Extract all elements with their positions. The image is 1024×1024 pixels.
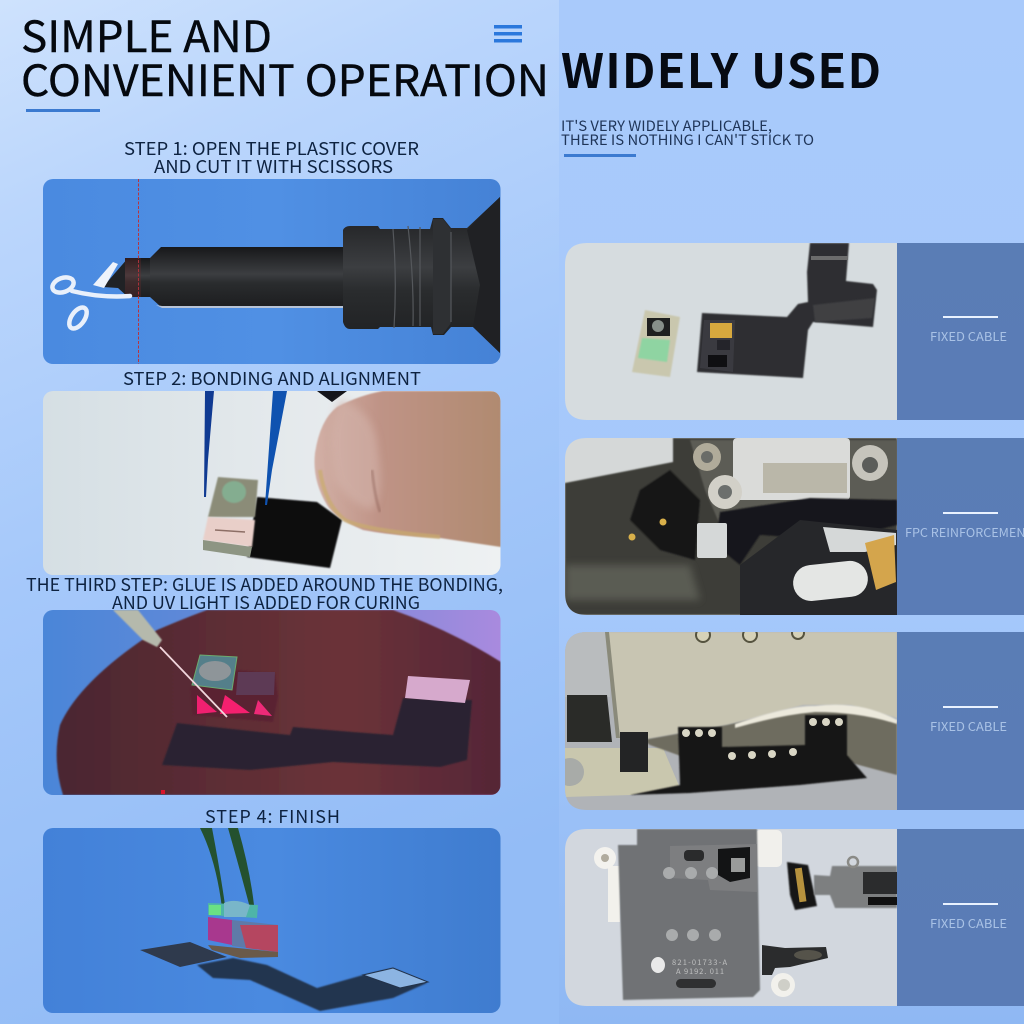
title: simple and convenient operation: CONVENIENT OPERATION xyxy=(21,47,549,109)
subheading text: IT'S VERY WIDELY APPLICABLE, xyxy=(561,115,772,136)
photo: apple part module: 821-01733-A xyxy=(672,957,727,968)
panel: step 3 glue and UV curing xyxy=(43,610,501,795)
tweezers xyxy=(200,828,225,908)
label: FPC REINFORCEMENT xyxy=(905,524,1024,541)
subheading text xyxy=(561,115,814,150)
sensor upper glass xyxy=(208,903,258,918)
icon: scissors xyxy=(50,275,130,332)
label line xyxy=(943,316,998,318)
flex cable on disc xyxy=(162,698,472,770)
sensor upper glass block xyxy=(192,655,237,690)
cut line xyxy=(138,179,139,364)
step 1 heading: AND CUT IT WITH SCISSORS xyxy=(154,153,393,179)
photo: sensor and flex xyxy=(565,243,897,420)
label panel xyxy=(897,632,1024,810)
scissors blade xyxy=(93,262,118,288)
panel: step 1 pen and scissors xyxy=(43,179,501,364)
tweezers xyxy=(204,391,214,497)
photo: charging port flex xyxy=(565,438,897,615)
sensor lower cube xyxy=(208,917,232,945)
stiffener plate xyxy=(405,676,470,703)
flex cable result xyxy=(197,958,427,1011)
step 1 heading: STEP 1: OPEN THE PLASTIC COVER xyxy=(124,135,419,161)
photo: metal plate connector xyxy=(556,627,897,810)
title: simple and convenient operation xyxy=(21,3,549,109)
card: fixed cable 1 xyxy=(565,243,1024,420)
sensor module xyxy=(208,477,258,517)
step 4 heading: STEP 4: FINISH xyxy=(205,803,340,829)
card: FPC reinforcement xyxy=(565,438,1024,615)
label line xyxy=(943,903,998,905)
photo: apple part module xyxy=(565,829,897,1006)
step 3 heading: AND UV LIGHT IS ADDED FOR CURING xyxy=(112,589,420,615)
disc xyxy=(57,610,501,795)
step 3 heading xyxy=(26,571,503,615)
label panel xyxy=(897,829,1024,1006)
background: right column xyxy=(559,0,1024,1024)
panel: step 2 bonding photo xyxy=(43,391,501,575)
title underline xyxy=(26,109,100,112)
syringe xyxy=(113,610,162,647)
label panel xyxy=(897,438,1024,615)
stiffener plate xyxy=(363,968,428,988)
panel: step 4 finished result xyxy=(43,828,501,1013)
label panel xyxy=(897,243,1024,420)
card: fixed cable 2 xyxy=(556,627,1024,810)
label: FIXED CABLE xyxy=(930,718,1007,735)
step 1 heading xyxy=(124,135,419,179)
label: FIXED CABLE xyxy=(930,328,1007,345)
step 2 heading: STEP 2: BONDING AND ALIGNMENT xyxy=(123,365,421,391)
background: left column xyxy=(0,0,559,1024)
sensor lower block xyxy=(190,670,278,722)
pen collar xyxy=(343,197,500,353)
heading: widely used: WIDELY USED xyxy=(561,33,881,102)
title: simple and convenient operation: SIMPLE AND xyxy=(21,3,272,65)
photo: apple part module: A 9192. 011 xyxy=(676,966,724,977)
red glow spot xyxy=(161,790,165,794)
finger xyxy=(314,391,501,547)
card: fixed cable 3 xyxy=(565,829,1024,1006)
icon: cutting tip xyxy=(104,262,125,294)
step 3 heading: THE THIRD STEP: GLUE IS ADDED AROUND THE BONDING, xyxy=(26,571,503,597)
label line xyxy=(943,706,998,708)
label line xyxy=(943,512,998,514)
label: FIXED CABLE xyxy=(930,915,1007,932)
subheading underline xyxy=(564,154,636,157)
icon: menu xyxy=(494,25,522,42)
flex cable xyxy=(247,497,342,568)
subheading text: THERE IS NOTHING I CAN'T STICK TO xyxy=(561,129,814,150)
